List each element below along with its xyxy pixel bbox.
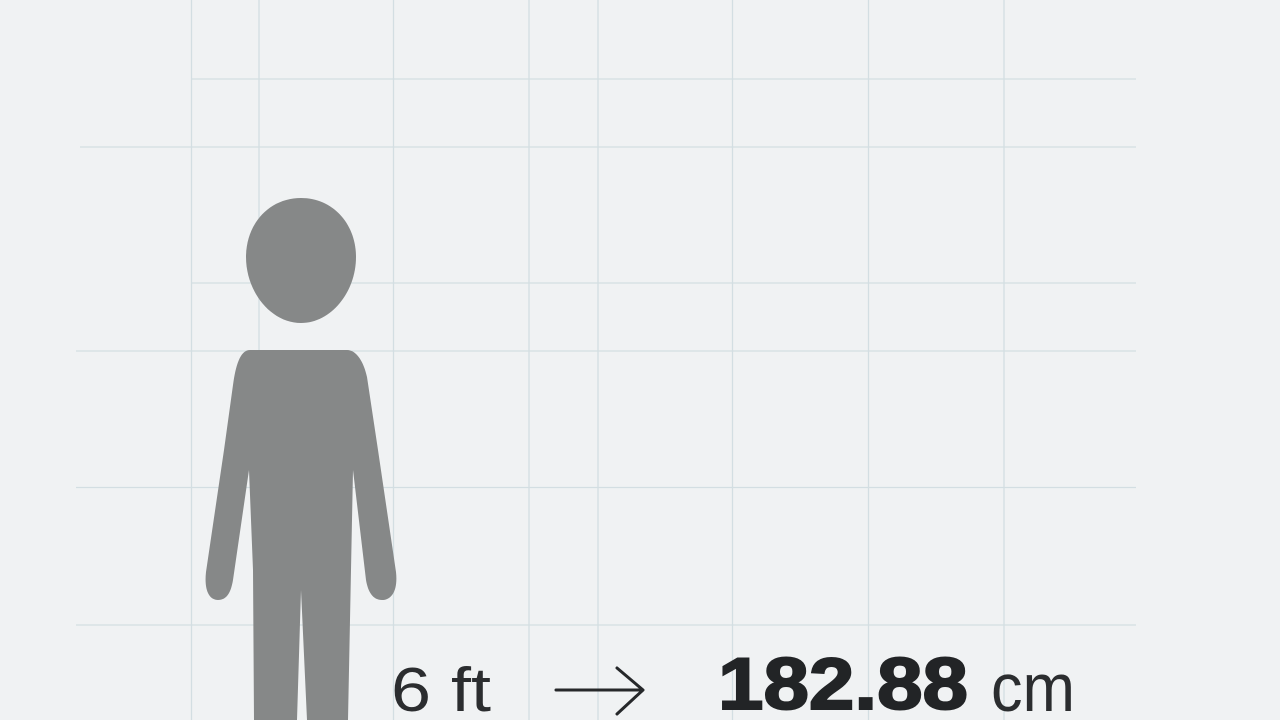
silhouette body (206, 350, 396, 720)
arrow (556, 668, 643, 714)
silhouette head (246, 198, 356, 323)
icon: human silhouette (206, 198, 396, 720)
